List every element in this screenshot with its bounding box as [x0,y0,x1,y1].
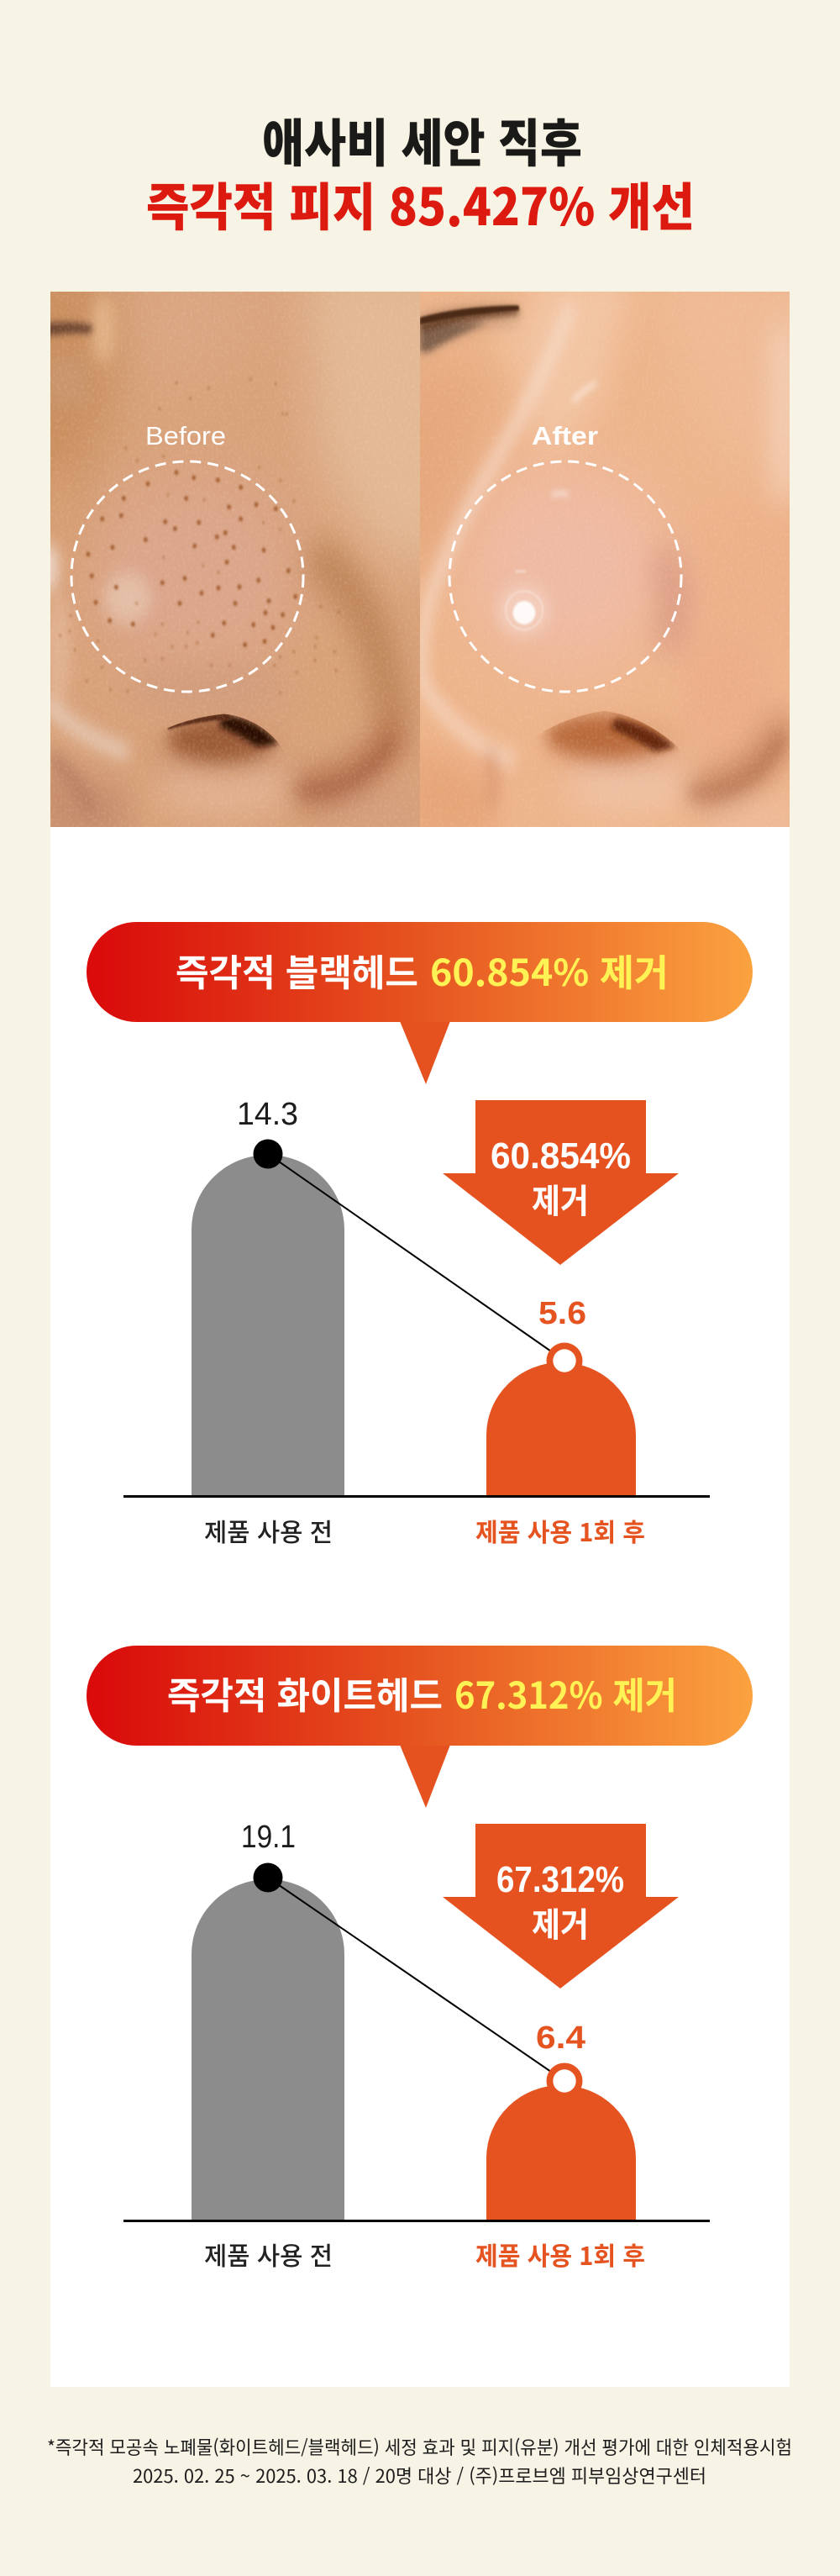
callout: whitehead headline: 67.312% 제거 [454,1666,677,1720]
arrow: reduction [443,1100,679,1265]
axis labels: 제품 사용 1회 후 [475,2236,645,2273]
skin grain [50,292,420,827]
title [146,102,695,240]
arrow: reduction: 제거 [532,1174,589,1223]
after circle and label: After [532,421,598,450]
before circle and label: Before [145,421,226,450]
skin grain [420,292,790,827]
arrow: reduction [443,1824,679,1989]
bar: after [486,2085,636,2220]
bar: before [192,1155,344,1496]
panel: after nose photo [420,292,790,827]
connector line and markers [254,1140,583,1378]
value: before: 14.3 [237,1097,298,1132]
callout: blackhead headline: 즉각적 블랙헤드 [176,943,418,997]
bar: after [486,1362,636,1496]
callout: blackhead headline [87,922,753,1084]
panel: whitehead chart [87,1646,753,2273]
arrow: reduction: 제거 [532,1898,589,1946]
connector line and markers [254,1862,583,2099]
axis labels: 제품 사용 1회 후 [475,1512,645,1549]
footnote: *즉각적 모공속 노폐물(화이트헤드/블랙헤드) 세정 효과 및 피지(유분) 개선 평가에 대한 인체적용시험 [47,2433,792,2460]
callout: blackhead headline: 60.854% 제거 [430,943,669,997]
callout: whitehead headline [87,1646,753,1808]
axis labels: 제품 사용 전 [204,1512,333,1549]
nostril [546,714,676,757]
footnote [47,2433,792,2489]
value: after: 5.6 [538,1296,586,1331]
axis [123,1495,710,1498]
axis labels: 제품 사용 전 [204,2236,333,2273]
arrow: reduction: 60.854% [491,1135,631,1177]
specular highlight [420,305,543,630]
value: after: 6.4 [536,2020,585,2056]
before circle and label [71,421,303,692]
panel: before nose photo [50,292,420,827]
axis labels [204,2236,645,2273]
panel: blackhead chart [87,922,753,1549]
title: 애사비 세안 직후 [262,102,582,176]
white panel [50,827,790,2387]
axis labels [204,1512,645,1549]
footnote: 2025. 02. 25 ~ 2025. 03. 18 / 20명 대상 / (주)프로브엠 피부임상연구센터 [133,2462,706,2489]
after circle and label [449,421,681,692]
nostril [168,713,279,761]
axis [123,2220,710,2222]
value: before: 19.1 [241,1820,296,1855]
arrow: reduction: 67.312% [496,1859,624,1900]
bar: before [192,1879,344,2220]
callout: whitehead headline: 즉각적 화이트헤드 [167,1666,443,1720]
pores [60,380,339,693]
title: 즉각적 피지 85.427% 개선 [146,166,695,240]
